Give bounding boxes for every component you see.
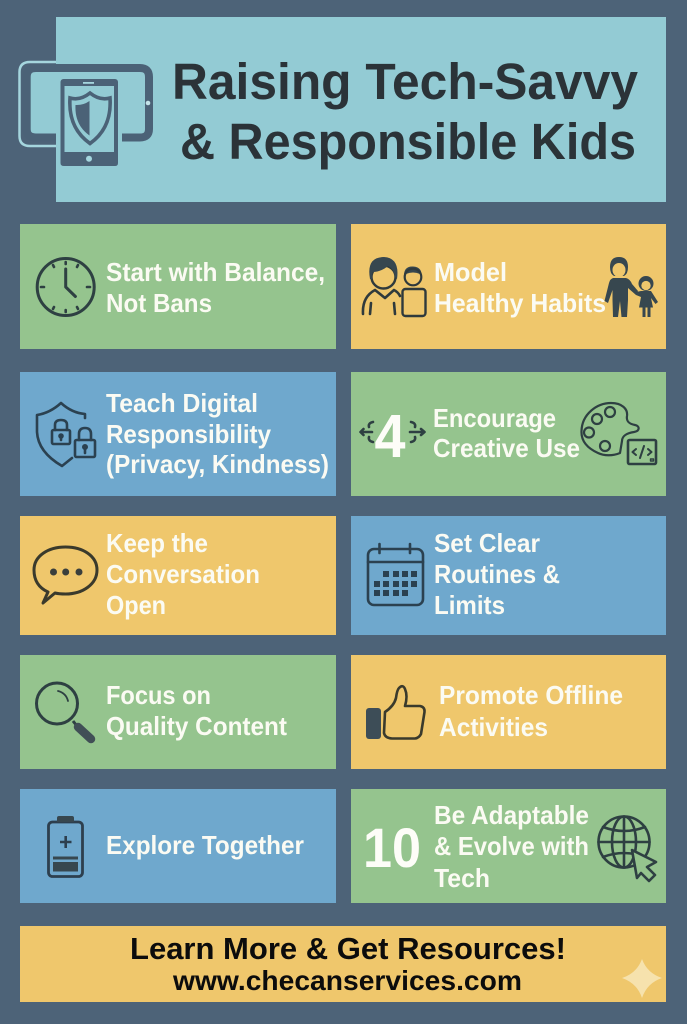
card text: (Privacy, Kindness) <box>106 449 329 479</box>
card text <box>434 800 589 893</box>
card text <box>106 257 325 318</box>
card background <box>20 372 336 496</box>
icon: number 4 with arrows <box>360 402 424 470</box>
banner background <box>56 17 666 202</box>
card text: Limits <box>434 590 505 620</box>
icon: parent holding child's hand <box>604 257 658 317</box>
card text: Healthy Habits <box>434 288 606 318</box>
panel: promote offline activities <box>351 655 666 769</box>
card background <box>20 516 336 635</box>
panel: start with balance <box>20 224 336 349</box>
panel: teach digital responsibility <box>20 372 336 496</box>
title text: Raising Tech-Savvy <box>172 53 639 110</box>
card text: Focus on <box>106 680 211 710</box>
panel: explore together <box>20 789 336 903</box>
icon: magnifying glass <box>36 683 91 739</box>
panel: model healthy habits <box>351 224 666 349</box>
card text: Encourage <box>433 403 556 433</box>
card text: Tech <box>434 863 490 893</box>
card text <box>434 528 560 620</box>
number 10: 10 <box>363 816 421 879</box>
banner background <box>20 926 666 1002</box>
card text: Teach Digital <box>106 388 258 418</box>
panel: keep the conversation open <box>20 516 336 635</box>
card text <box>106 388 329 479</box>
panel: encourage creative use <box>351 372 666 496</box>
card text: Activities <box>439 712 548 742</box>
card text: Routines & <box>434 559 560 589</box>
card background <box>351 372 666 496</box>
icon: tablet and phone with shield <box>20 62 150 166</box>
card text: Quality Content <box>106 711 287 741</box>
card text: Conversation <box>106 559 260 589</box>
icon: battery <box>48 816 82 876</box>
card text: Promote Offline <box>439 680 623 710</box>
call to action text <box>130 931 566 996</box>
panel: call to action <box>20 926 666 1002</box>
icon: shield with padlocks <box>37 403 95 466</box>
title text: & Responsible Kids <box>180 113 636 170</box>
card text: Creative Use <box>433 433 580 463</box>
icon: paint palette with code window <box>581 403 656 464</box>
card text <box>439 680 623 742</box>
card background <box>351 516 666 635</box>
icon: sparkle <box>622 959 662 998</box>
icon: parent and child outline <box>363 257 426 316</box>
icon: number 4 with arrows: 4 <box>374 402 406 470</box>
card text: Not Bans <box>106 288 212 318</box>
card text: Open <box>106 590 166 620</box>
call to action text: www.checanservices.com <box>172 965 522 996</box>
icon: clock <box>37 258 94 316</box>
icon: globe with cursor <box>598 816 656 881</box>
panel: title banner <box>20 17 666 202</box>
panel: set clear routines <box>351 516 666 635</box>
card text <box>433 403 580 463</box>
card text: Set Clear <box>434 528 540 558</box>
card text: Model <box>434 257 507 287</box>
card text <box>106 680 287 741</box>
card text <box>106 528 260 620</box>
card text: Start with Balance, <box>106 257 325 287</box>
icon: speech bubble <box>34 547 97 603</box>
call to action text: Learn More & Get Resources! <box>130 931 566 966</box>
card text: Responsibility <box>106 419 271 449</box>
icon: calendar <box>368 544 423 605</box>
title text <box>172 53 639 170</box>
card background <box>351 655 666 769</box>
card text: & Evolve with <box>434 831 589 861</box>
card background <box>20 224 336 349</box>
icon: thumbs up <box>366 686 425 739</box>
card text: Explore Together <box>106 830 304 860</box>
card text <box>434 257 606 318</box>
card background <box>20 789 336 903</box>
card background <box>351 789 666 903</box>
panel: be adaptable <box>351 789 666 903</box>
panel: focus on quality content <box>20 655 336 769</box>
card text: Keep the <box>106 528 208 558</box>
card background <box>20 655 336 769</box>
card text: Be Adaptable <box>434 800 589 830</box>
card background <box>351 224 666 349</box>
